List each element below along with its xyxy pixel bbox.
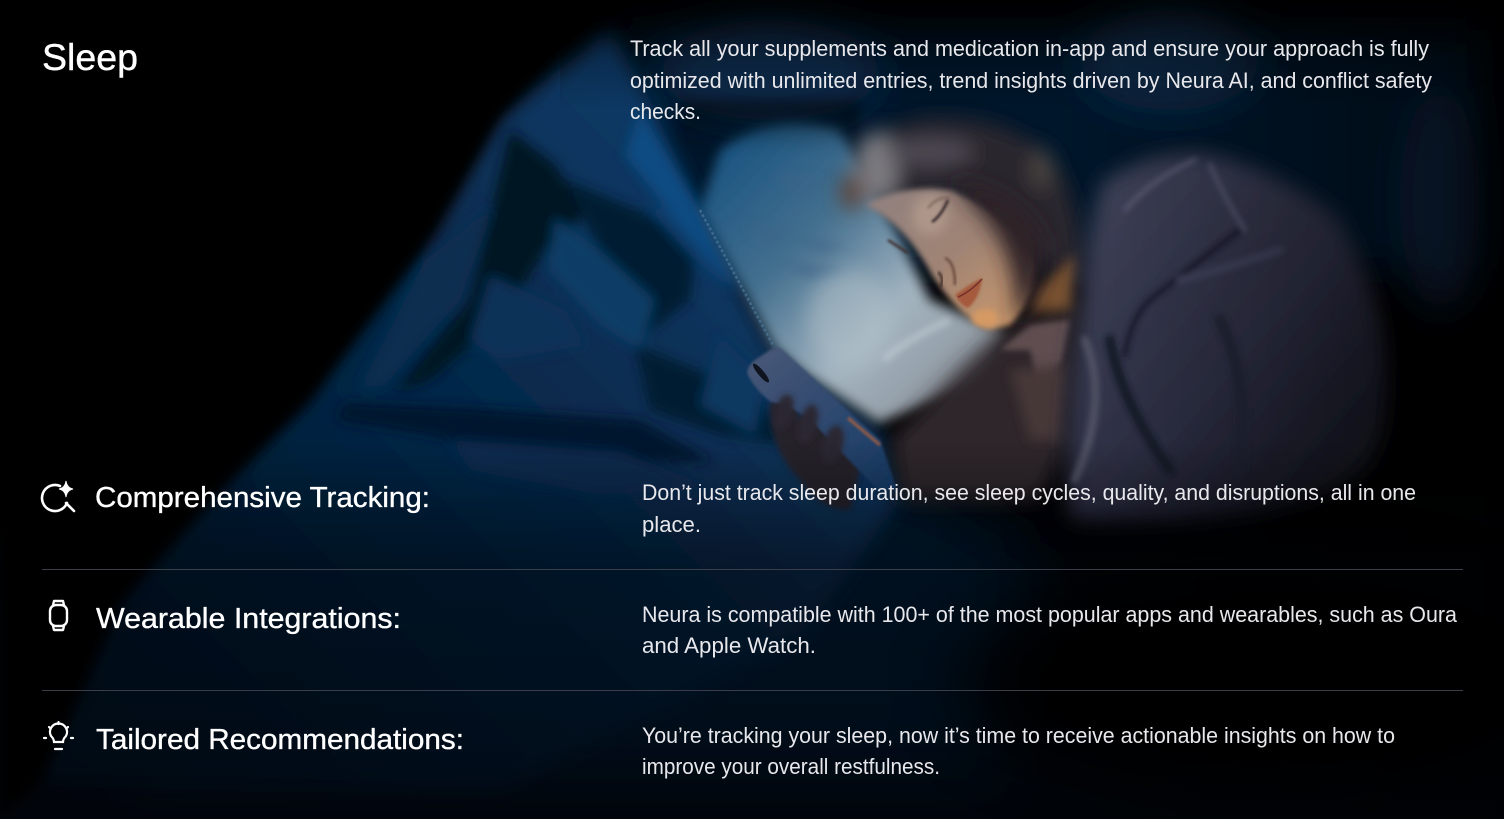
hoodie	[1067, 153, 1387, 521]
heading: wearable integrations: Wearable Integrations:	[96, 603, 401, 635]
hair	[840, 118, 1083, 290]
heading: comprehensive tracking: Comprehensive Tracking:	[95, 482, 430, 514]
description: wearable integrations: Neura is compatible with 100+ of the most popular apps and wearables, such as Oura	[642, 602, 1458, 627]
icon: watch	[50, 601, 67, 630]
title: Sleep	[42, 37, 138, 78]
closed eyes	[932, 200, 948, 222]
description: wearable integrations: and Apple Watch.	[642, 633, 816, 658]
blanket	[40, 30, 900, 790]
fade overlays	[0, 460, 1256, 819]
hand	[770, 394, 860, 510]
description: wearable integrations	[642, 602, 1458, 658]
description: tailored recommendations	[642, 723, 1395, 779]
intro paragraph: optimized with unlimited entries, trend insights driven by Neura AI, and conflict safety	[630, 68, 1432, 93]
upper right dark bedding	[620, 10, 1480, 310]
phone	[747, 348, 897, 490]
top fade on pillow	[680, 100, 860, 150]
row: comprehensive tracking	[42, 480, 1416, 537]
icon: sparkle search	[42, 481, 74, 511]
pillow	[680, 100, 1008, 423]
blanket folds	[335, 110, 785, 495]
description: tailored recommendations: You’re tracking your sleep, now it’s time to receive actionable insights on how to	[642, 723, 1395, 748]
description: comprehensive tracking: place.	[642, 512, 701, 537]
icon: light bulb	[44, 722, 73, 749]
description: tailored recommendations: improve your overall restfulness.	[642, 754, 940, 779]
nose	[945, 258, 955, 285]
intro paragraph: Track all your supplements and medication in-app and ensure your approach is fully	[630, 36, 1429, 61]
face	[866, 178, 1046, 330]
lips	[955, 278, 982, 308]
row: tailored recommendations	[44, 722, 1395, 779]
intro paragraph	[630, 36, 1432, 124]
row: wearable integrations	[50, 601, 1458, 658]
description: comprehensive tracking: Don’t just track sleep duration, see sleep cycles, quality, and disruptions, all in one	[642, 480, 1416, 505]
lower navy haze	[561, 492, 1040, 778]
intro paragraph: checks.	[630, 99, 701, 124]
description: comprehensive tracking	[642, 480, 1416, 537]
heading: tailored recommendations: Tailored Recommendations:	[96, 724, 464, 756]
hoodie brown inner	[890, 255, 1080, 500]
